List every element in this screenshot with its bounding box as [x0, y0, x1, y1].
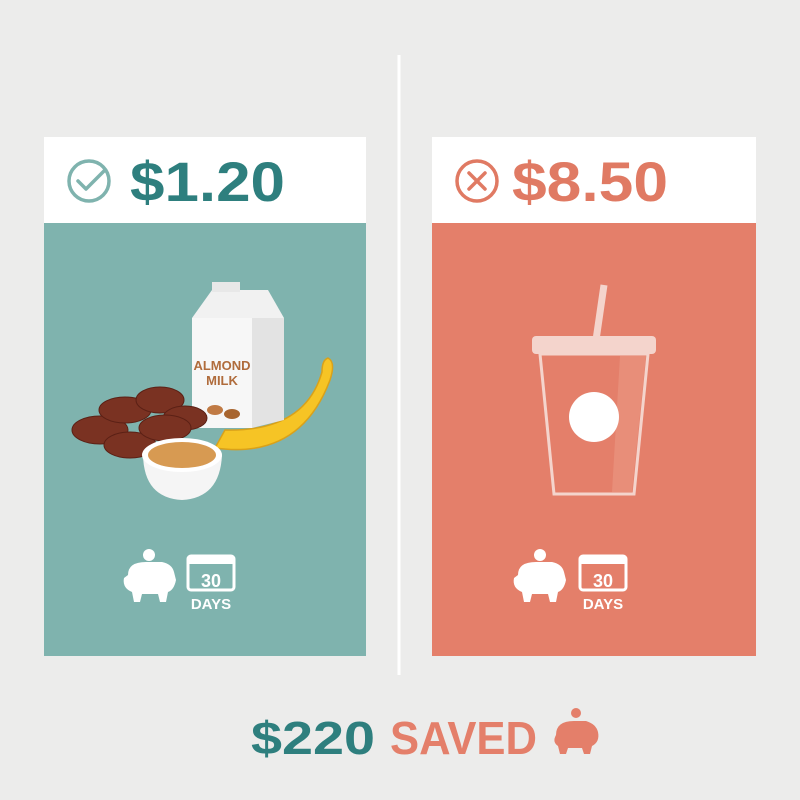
icon: piggy bank — [554, 708, 598, 754]
illustration: ingredients: ALMOND — [193, 358, 251, 373]
icons: piggy + calendar left: 30 — [201, 571, 221, 591]
bottom summary: SAVED — [390, 712, 537, 764]
illustration: ingredients: MILK — [206, 373, 238, 388]
bottom summary — [251, 708, 598, 764]
price text right: $8.50 — [512, 150, 668, 213]
icons: piggy + calendar right — [514, 549, 626, 613]
icons: piggy + calendar left: DAYS — [191, 596, 231, 613]
icons: piggy + calendar right: DAYS — [583, 596, 623, 613]
price text left: $1.20 — [130, 150, 285, 213]
panel: coffee shop drink — [432, 137, 756, 656]
icons: piggy + calendar right: 30 — [593, 571, 613, 591]
icon: cup — [532, 285, 656, 494]
header: left price — [44, 137, 366, 223]
bottom summary: $220 — [251, 712, 375, 764]
panel: homemade smoothie — [44, 137, 366, 656]
icon: x circle — [457, 161, 497, 201]
icon: check circle — [69, 161, 109, 201]
body teal — [44, 223, 366, 656]
icons: piggy + calendar left — [124, 549, 234, 613]
header: right price — [432, 137, 756, 223]
illustration: ingredients — [72, 282, 333, 500]
